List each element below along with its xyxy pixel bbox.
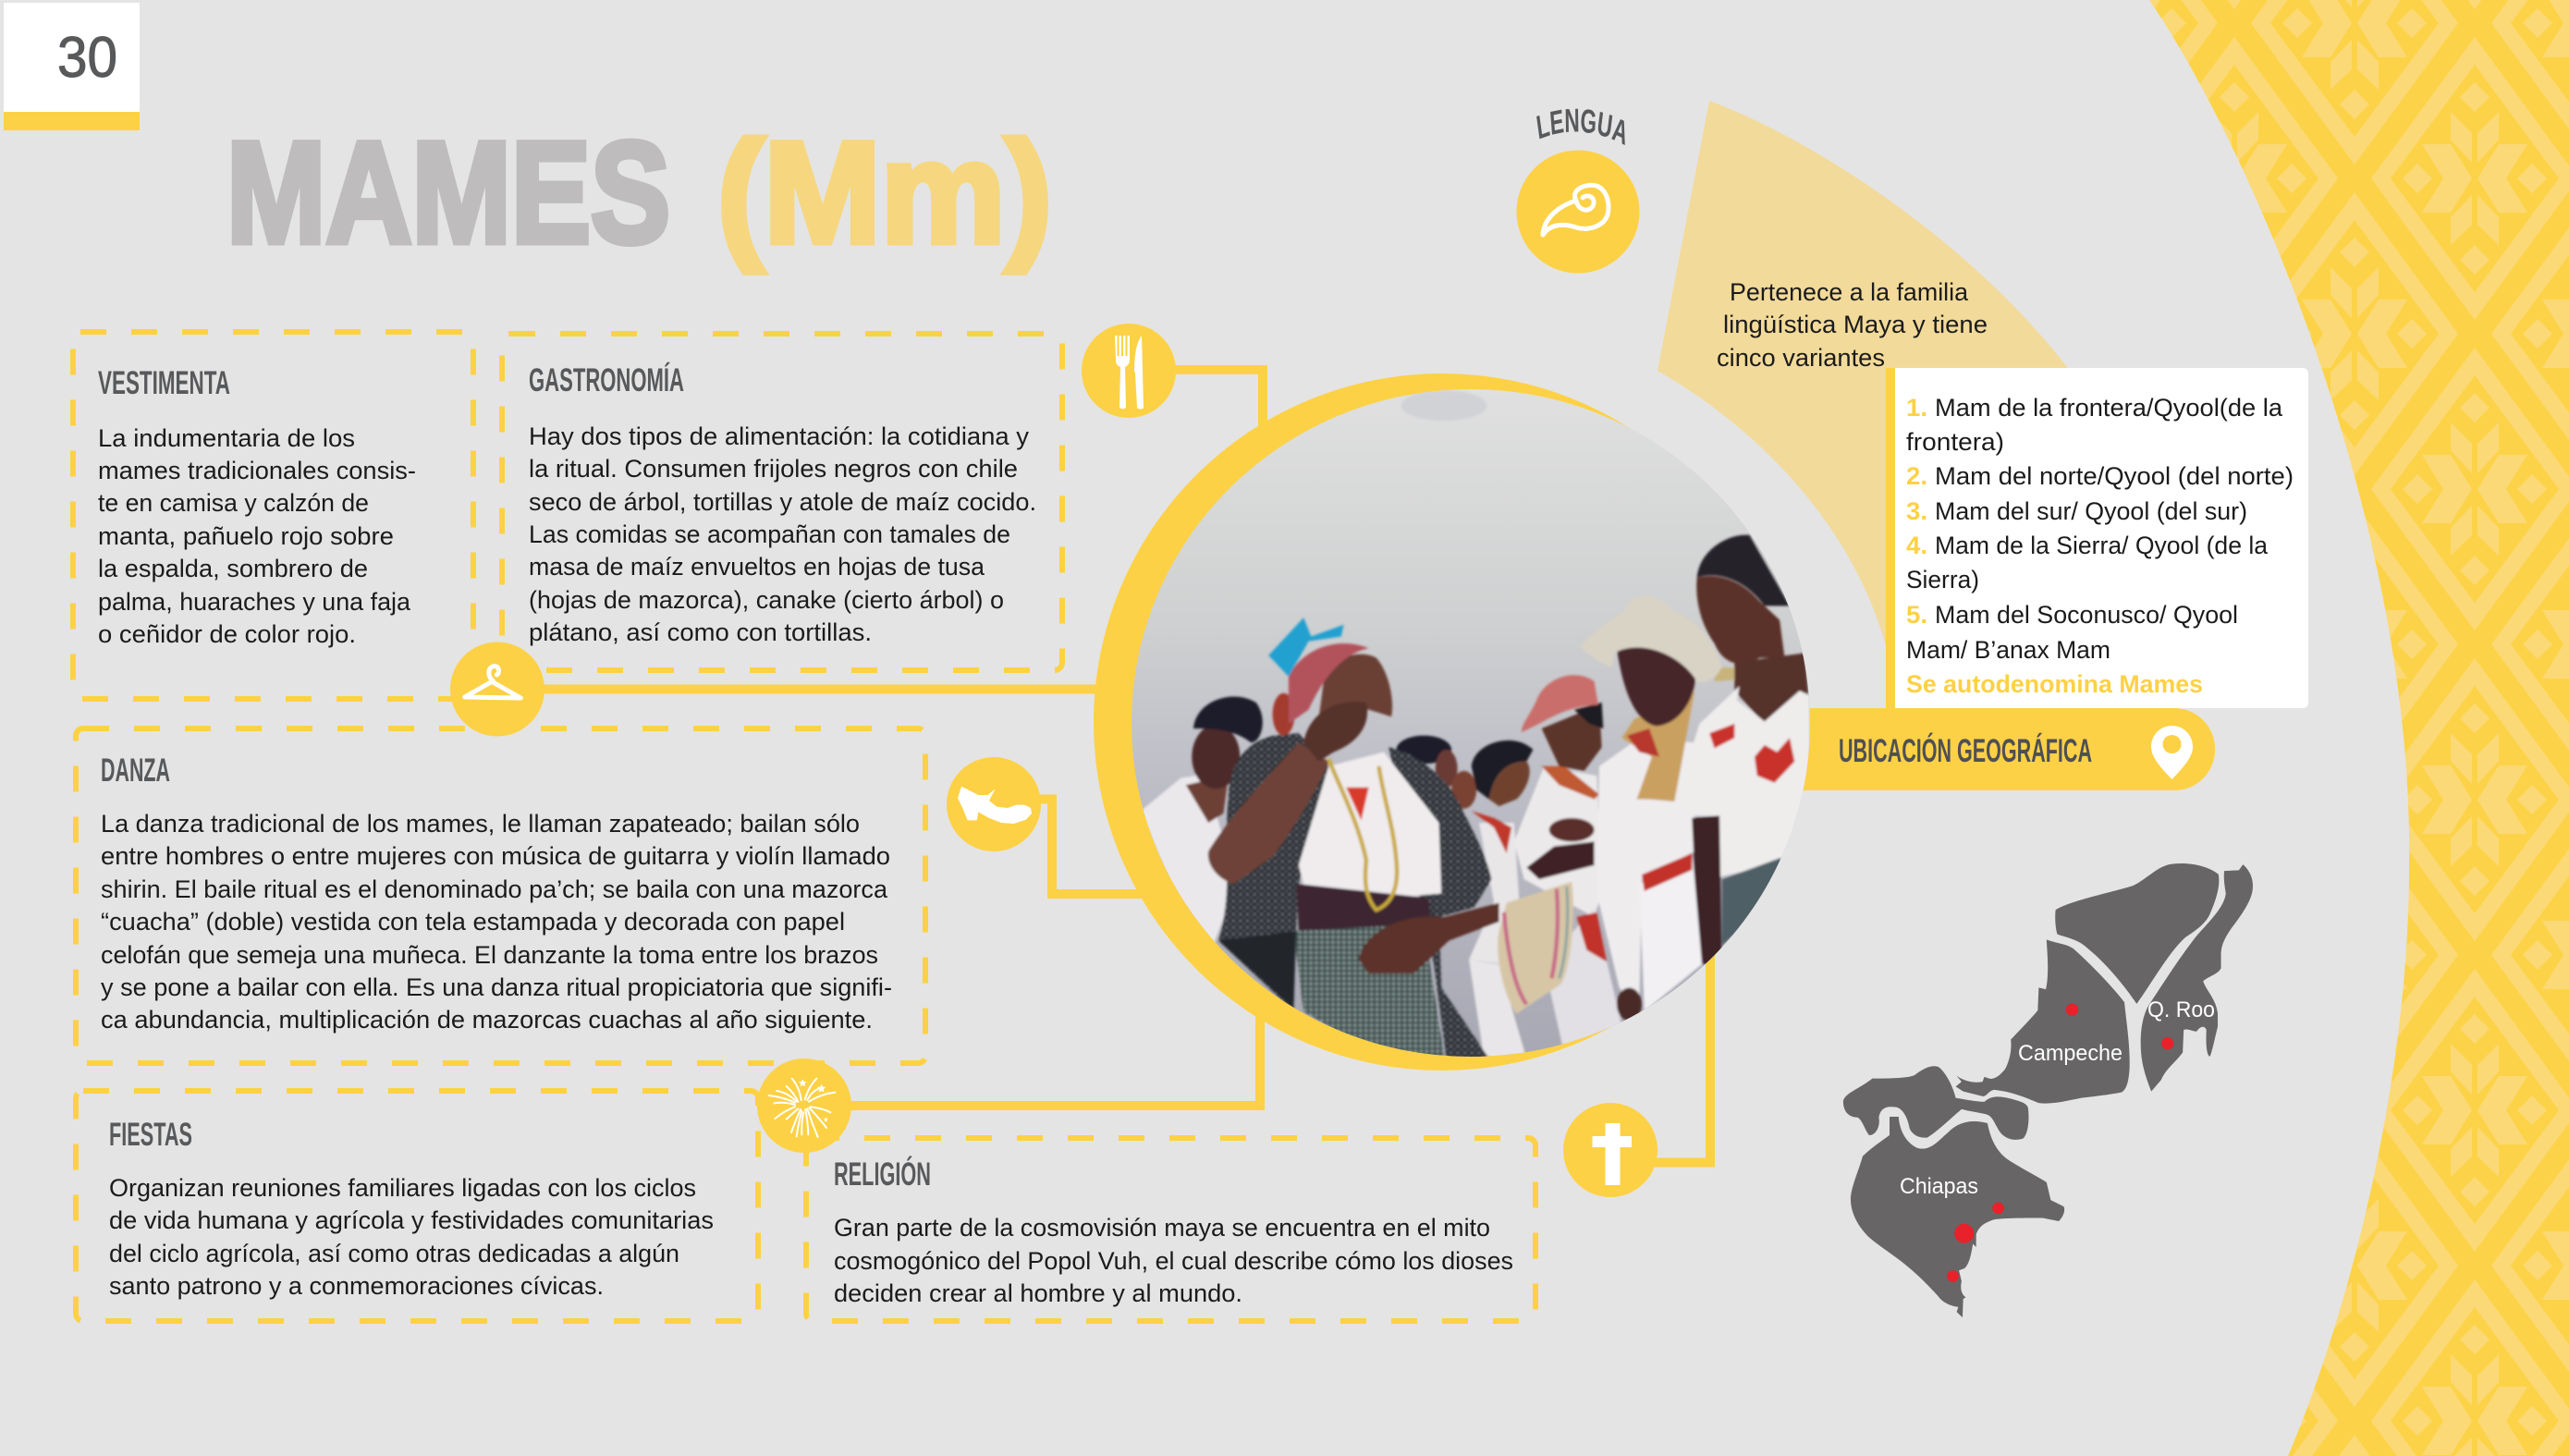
location pill	[1756, 708, 2215, 790]
heading: religion: RELIGIÓN	[834, 1156, 931, 1193]
panel: fiestas	[76, 1091, 758, 1321]
panel: danza	[76, 728, 925, 1063]
icon: fireworks	[757, 1058, 851, 1153]
map: southeast Mexico: Chiapas	[1900, 1174, 1978, 1199]
icon: fork and knife	[1082, 324, 1176, 418]
text: fiestas: Organizan reuniones familiares ligadas con los ciclos	[109, 1174, 696, 1202]
map: southeast Mexico: Q. Roo	[2147, 997, 2215, 1022]
heading: gastronomia: GASTRONOMÍA	[529, 361, 684, 398]
heading: vestimenta: VESTIMENTA	[98, 365, 230, 401]
icon: cross	[1563, 1103, 1658, 1197]
text: vestimenta	[98, 424, 416, 648]
text: gastronomia: la ritual. Consumen frijoles negros con chile	[529, 455, 1018, 483]
text: vestimenta: La indumentaria de los	[98, 424, 355, 452]
page number tab: 30	[57, 26, 117, 90]
text: danza: La danza tradicional de los mames, le llaman zapateado; bailan sólo	[101, 810, 860, 838]
text: vestimenta: te en camisa y calzón de	[98, 489, 369, 517]
text: vestimenta: palma, huaraches y una faja	[98, 588, 411, 616]
icon: location pin	[2151, 726, 2193, 779]
heading: ubicacion geografica: UBICACIÓN GEOGRÁFICA	[1839, 732, 2092, 769]
text: danza	[101, 810, 892, 1034]
language fan	[1658, 101, 2071, 666]
text: lengua description: cinco variantes	[1717, 344, 1885, 372]
panel: variants list: 2.	[1906, 462, 1927, 490]
panel: variants list: Mam de la Sierra/ Qyool (de la	[1935, 532, 2269, 559]
connector lines	[536, 370, 1710, 1163]
icon: shoe	[947, 757, 1041, 851]
heading: lengua	[1536, 109, 1625, 145]
icon: hanger	[450, 642, 544, 736]
panel: variants list: 3.	[1906, 497, 1927, 525]
text: vestimenta: o ceñidor de color rojo.	[98, 620, 356, 648]
text: danza: “cuacha” (doble) vestida con tela estampada y decorada con papel	[101, 908, 845, 936]
text: gastronomia: masa de maíz envueltos en hojas de tusa	[529, 553, 985, 581]
photo: group of Mam people	[1132, 389, 1810, 1057]
text: fiestas	[109, 1174, 714, 1300]
text: gastronomia	[529, 422, 1036, 646]
title: (Mm)	[717, 113, 1052, 274]
text: religion: deciden crear al hombre y al mundo.	[834, 1279, 1242, 1307]
text: vestimenta: manta, pañuelo rojo sobre	[98, 522, 394, 550]
text: religion	[834, 1214, 1513, 1307]
text: danza: celofán que semeja una muñeca. El danzante la toma entre los brazos	[101, 941, 878, 969]
text: religion: Gran parte de la cosmovisión maya se encuentra en el mito	[834, 1214, 1490, 1242]
panel: variants list: Sierra)	[1906, 566, 1979, 593]
text: lengua description	[1717, 278, 1988, 372]
panel: variants list: Mam del sur/ Qyool (del sur)	[1935, 497, 2247, 525]
panel: variants list: frontera)	[1906, 428, 2004, 456]
panel: variants list: 4.	[1906, 532, 1927, 559]
title: MAMES	[226, 113, 670, 274]
panel: variants list: Mam/ B’anax Mam	[1906, 636, 2110, 664]
text: danza: shirin. El baile ritual es el denominado pa’ch; se baila con una mazorca	[101, 875, 888, 903]
patterned yellow band	[2149, 0, 2569, 1456]
text: lengua description: lingüística Maya y tiene	[1723, 311, 1988, 338]
text: gastronomia: (hojas de mazorca), canake (cierto árbol) o	[529, 586, 1004, 614]
text: gastronomia: plátano, así como con tortillas.	[529, 618, 872, 646]
panel: variants list: 5.	[1906, 601, 1927, 629]
text: gastronomia: Las comidas se acompañan con tamales de	[529, 520, 1010, 548]
text: vestimenta: la espalda, sombrero de	[98, 555, 368, 582]
panel: variants list: Mam del norte/Qyool (del norte)	[1935, 462, 2294, 490]
text: gastronomia: seco de árbol, tortillas y atole de maíz cocido.	[529, 488, 1036, 516]
panel: religion	[806, 1138, 1535, 1321]
text: danza: entre hombres o entre mujeres con música de guitarra y violín llamado	[101, 842, 890, 870]
panel: variants list: 1.	[1906, 394, 1927, 422]
text: lengua description: Pertenece a la familia	[1730, 278, 1969, 306]
heading: fiestas: FIESTAS	[109, 1117, 192, 1153]
text: danza: ca abundancia, multiplicación de mazorcas cuachas al año siguiente.	[101, 1006, 873, 1034]
text: fiestas: de vida humana y agrícola y festividades comunitarias	[109, 1206, 714, 1234]
text: fiestas: del ciclo agrícola, así como otras dedicadas a algún	[109, 1240, 679, 1267]
panel: variants list: Mam de la frontera/Qyool(de la	[1935, 394, 2283, 422]
panel: vestimenta	[73, 332, 473, 699]
map: southeast Mexico: Campeche	[2018, 1041, 2122, 1066]
text: gastronomia: Hay dos tipos de alimentación: la cotidiana y	[529, 422, 1029, 450]
map: southeast Mexico	[1843, 863, 2253, 1317]
icon: language	[1516, 150, 1640, 274]
panel: variants list: Mam del Soconusco/ Qyool	[1935, 601, 2238, 629]
page number tab	[4, 3, 140, 130]
text: danza: y se pone a bailar con ella. Es una danza ritual propiciatoria que signifi-	[101, 973, 892, 1001]
heading: lengua: LENGUA	[1536, 109, 1625, 145]
text: fiestas: santo patrono y a conmemoraciones cívicas.	[109, 1272, 604, 1300]
panel: variants list	[1886, 368, 2308, 708]
panel: variants list: Se autodenomina Mames	[1906, 670, 2203, 698]
heading: danza: DANZA	[101, 752, 170, 789]
yellow ring behind photo	[1094, 373, 1791, 1071]
text: vestimenta: mames tradicionales consis-	[98, 457, 416, 484]
title	[226, 113, 1052, 274]
panel: gastronomia	[502, 334, 1062, 670]
text: religion: cosmogónico del Popol Vuh, el cual describe cómo los dioses	[834, 1247, 1513, 1275]
